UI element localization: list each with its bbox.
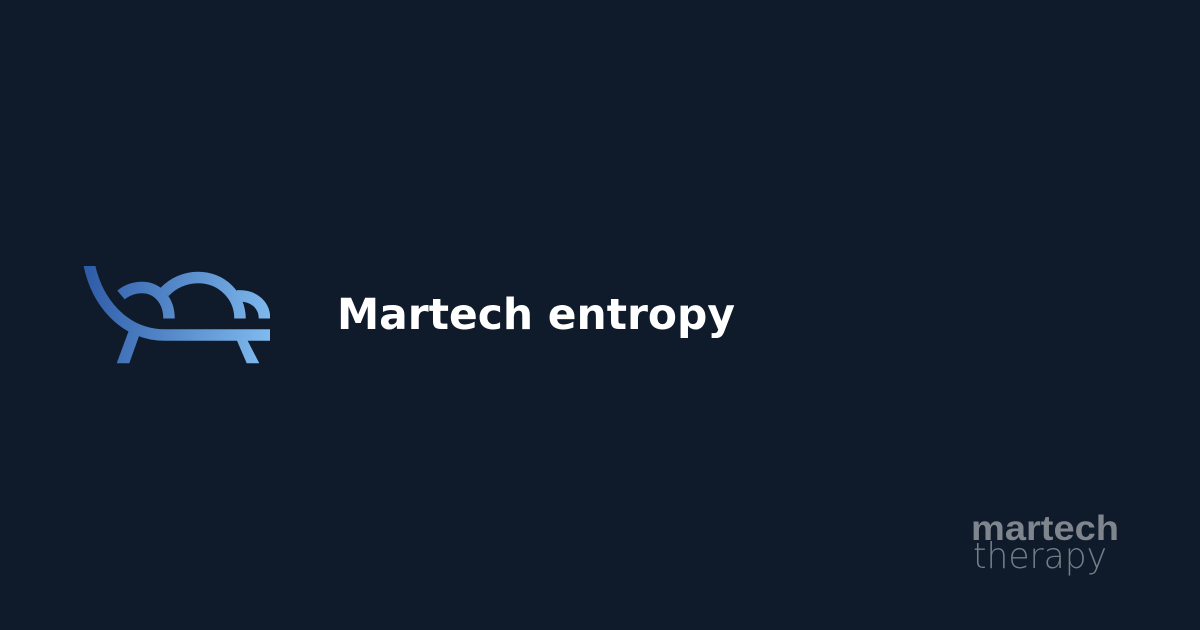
wordmark: martech therapy bbox=[971, 509, 1119, 577]
title: Martech entropy bbox=[337, 290, 735, 339]
wordmark: martech therapy: therapy bbox=[973, 536, 1107, 577]
icon: martech therapy couch logo bbox=[84, 266, 270, 364]
wordmark: martech therapy: martech bbox=[971, 509, 1119, 548]
